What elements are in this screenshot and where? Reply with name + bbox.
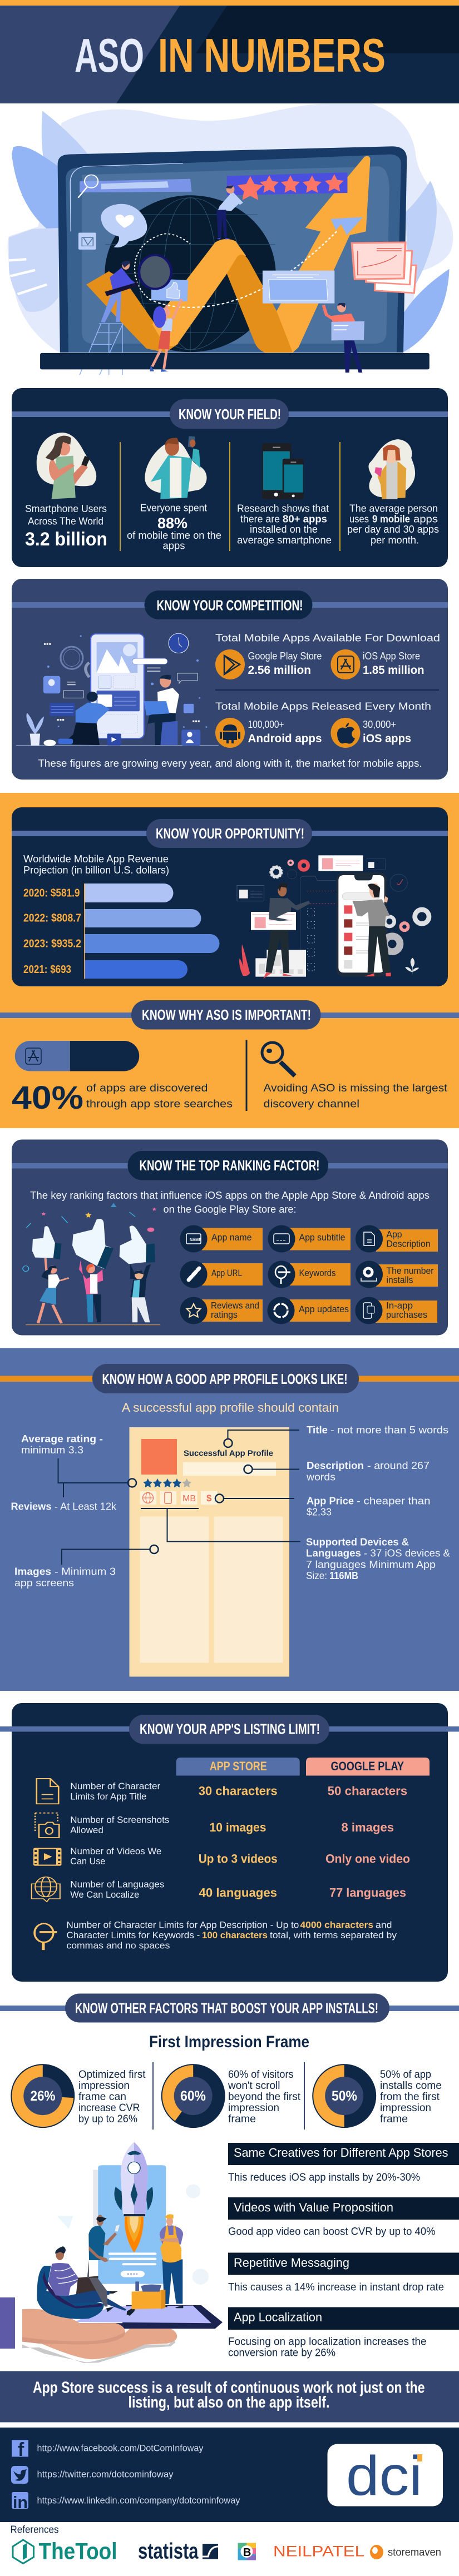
row: videos: Only one video: [325, 1852, 410, 1866]
callout: title: - not more than 5 words: [330, 1425, 448, 1436]
icon: twitter: [11, 2466, 28, 2484]
text: smartphone users: Across The World: [28, 516, 103, 527]
logo: storemaven: storemaven: [388, 2547, 441, 2559]
text: avoiding aso: Avoiding ASO is missing the largest: [264, 1083, 448, 1094]
tile: app name: [180, 1225, 263, 1252]
text: successful app profile subtitle: A successful app profile should contain: [122, 1401, 339, 1414]
row: videos: Can Use: [70, 1857, 105, 1867]
text: smartphone users: [25, 503, 107, 550]
icon: android: [215, 718, 245, 748]
text: description and keyword limits: total, with terms separated by: [270, 1930, 397, 1940]
callout: images: Images: [14, 1566, 51, 1577]
stat: google play store: Google Play Store: [248, 651, 322, 662]
tile: app updates: App updates: [299, 1304, 349, 1314]
logo: storemaven: [370, 2545, 441, 2559]
info icons: $: [206, 1493, 212, 1503]
text: description and keyword limits: 4000 characters: [300, 1920, 373, 1930]
text: 9 mobile apps per day: 9 mobile: [372, 514, 410, 525]
man holding card: [323, 302, 364, 373]
text: visitors won't scroll: beyond the first: [228, 2091, 301, 2103]
bar chart: revenue projection: [23, 884, 219, 979]
tile: app url: App URL: [211, 1268, 242, 1278]
footer panel: [0, 2428, 459, 2522]
tile: keywords: Keywords: [299, 1268, 336, 1278]
rocket and app screen: [57, 2142, 209, 2304]
tile: app description: App: [386, 1229, 402, 1240]
factor: app localization: Focusing on app localization increases the: [228, 2336, 426, 2347]
stat: ios apps: [363, 719, 411, 745]
heading: know your field: KNOW YOUR FIELD!: [179, 406, 281, 423]
row: videos: Number of Videos We: [70, 1847, 161, 1857]
logo: neil patel: NEILPATEL: [273, 2543, 364, 2560]
row: languages: [70, 1879, 406, 1900]
icon: video film: [33, 1848, 61, 1866]
title: [75, 29, 386, 82]
callout connectors: [58, 1430, 300, 1565]
text: 9 mobile apps per day: per day and 30 apps: [347, 524, 439, 535]
callout: supported devices and languages: Supported Devices &: [306, 1537, 409, 1548]
link: facebook: http://www.facebook.com/DotComInfoway: [37, 2443, 204, 2453]
callout: reviews: Reviews: [11, 1501, 51, 1512]
references: [10, 2524, 441, 2564]
factor: repetitive messaging: [228, 2253, 459, 2293]
closing banner: listing, but also on the app itself.: [128, 2394, 329, 2411]
logo: statista: statista: [138, 2539, 199, 2563]
text: 88 percent mobile time: 88%: [157, 515, 187, 532]
row: languages: 40 languages: [199, 1886, 277, 1899]
factor: same creatives: Same Creatives for Different App Stores: [234, 2146, 448, 2160]
search bar: [78, 175, 192, 198]
callout: images: app screens: [14, 1577, 74, 1589]
bar chart: revenue projection: 2021: $693: [23, 964, 71, 976]
text: 88 percent mobile time: [127, 503, 221, 552]
icon: magnifying glass: [262, 1043, 295, 1076]
heading: know your competition: KNOW YOUR COMPETITION!: [157, 597, 303, 614]
thumbs up card: [151, 279, 188, 301]
person holding star: [216, 185, 241, 240]
logo: dci: [327, 2444, 443, 2507]
text: visitors won't scroll: 60% of visitors: [228, 2069, 294, 2081]
bar chart: revenue projection: 2020: $581.9: [23, 887, 80, 900]
closing banner: [0, 2371, 459, 2422]
stat: ios apps: 30,000+: [363, 719, 396, 730]
factor: repetitive messaging: Repetitive Messaging: [234, 2256, 349, 2270]
star rating: [143, 1478, 191, 1487]
icon: document: [37, 1779, 58, 1804]
woman in red skirt: [150, 299, 181, 372]
row: screenshots allowed: 10 images: [209, 1820, 266, 1834]
heading: know your opportunity: KNOW YOUR OPPORTUNITY!: [156, 825, 304, 842]
callout: app price: [307, 1496, 431, 1518]
text: visitors won't scroll: won't scroll: [228, 2080, 280, 2092]
growth arrow ribbon: [86, 156, 371, 353]
stat: google play store: 2.56 million: [248, 664, 311, 677]
ladder: [80, 324, 123, 375]
column header: app store: APP STORE: [210, 1759, 267, 1773]
factor: app localization: conversion rate by 26%: [228, 2347, 335, 2359]
text: figures are growing: These figures are growing every year, and along with it, the market for mobile apps.: [38, 758, 422, 769]
callout: average rating: minimum 3.3: [21, 1445, 83, 1456]
globe: [105, 195, 276, 352]
tile: app updates: [267, 1297, 351, 1324]
tile: keywords: [268, 1261, 351, 1288]
stat: android apps: [248, 719, 322, 745]
heading: know why aso is important: KNOW WHY ASO IS IMPORTANT!: [142, 1006, 311, 1023]
text: apps available heading: Total Mobile Apps Available For Download: [215, 633, 440, 644]
stat: ios app store: iOS App Store: [363, 651, 420, 662]
row: screenshots allowed: 8 images: [342, 1820, 394, 1834]
app users and builders: [37, 2214, 183, 2319]
browser card: [263, 271, 334, 304]
illustration: people lifting thumbs up: [23, 1203, 160, 1325]
illustration: people building an app: [16, 633, 219, 746]
factor: videos with value proposition: Good app video can boost CVR by up to 40%: [228, 2226, 436, 2237]
text: 80+ apps installed: [237, 503, 332, 546]
factor: same creatives: This reduces iOS app installs by 20%-30%: [228, 2172, 420, 2183]
icon: apple: [330, 718, 361, 748]
app profile mockup: [129, 1427, 289, 1677]
text: app installs from first frame: impression: [380, 2102, 431, 2114]
text: description and keyword limits: [66, 1920, 397, 1950]
callout: supported devices and languages: 116MB: [329, 1570, 358, 1581]
panel: know your app's listing limit: [0, 1703, 459, 1982]
panel: know the top ranking factor: [12, 1140, 448, 1336]
callout: average rating: [21, 1433, 103, 1456]
text: revenue chart title: [23, 853, 169, 876]
donut chart: 26 percent: 26%: [30, 2088, 56, 2104]
callout: reviews: [11, 1501, 117, 1512]
tile: the number installs: installs: [386, 1274, 413, 1285]
callout: app price: App Price: [307, 1496, 354, 1507]
paper plane and dashed route: [135, 217, 363, 307]
heading: references: References: [10, 2524, 59, 2535]
text: 80+ apps installed: 80+ apps: [283, 514, 327, 525]
donut chart: 60 percent: [161, 2064, 225, 2128]
stat: ios app store: 1.85 million: [363, 664, 424, 677]
row: videos: [70, 1847, 410, 1867]
text: 80+ apps installed: average smartphone: [237, 535, 332, 546]
factor: repetitive messaging: This causes a 14% increase in instant drop rate: [228, 2282, 444, 2293]
row: app title limit: Limits for App Title: [70, 1791, 146, 1801]
icon: facebook: f: [18, 2439, 24, 2460]
tile: app name: NAME: [190, 1238, 201, 1242]
text: optimized first impression: increase CVR: [78, 2102, 140, 2114]
text: 80+ apps installed: Research shows that: [237, 503, 329, 514]
tile: app description: Description: [386, 1239, 431, 1249]
panel: know your opportunity: [12, 807, 448, 986]
icon: man taking selfie: [145, 436, 207, 499]
text: 88 percent mobile time: of mobile time on the: [127, 530, 221, 541]
magnifier person: [101, 255, 171, 322]
heading: know your app's listing limit: KNOW YOUR APP'S LISTING LIMIT!: [140, 1720, 320, 1737]
callout: description: [306, 1460, 430, 1482]
row: screenshots allowed: Allowed: [70, 1825, 103, 1835]
icon: facebook: [12, 2439, 28, 2460]
heading: know the top ranking factor: KNOW THE TOP RANKING FACTOR!: [139, 1157, 319, 1174]
row: languages: We Can Localize: [70, 1890, 139, 1900]
bar chart: revenue projection: 2022: $808.7: [23, 912, 81, 924]
stat: 40 percent discovered: 40%: [12, 1080, 83, 1116]
text: optimized first impression: Optimized first: [78, 2069, 146, 2081]
factor: app localization: App Localization: [234, 2310, 322, 2324]
text: optimized first impression: impression: [78, 2080, 130, 2092]
stat: ios app store: [363, 651, 424, 677]
callout: supported devices and languages: Languages: [306, 1548, 361, 1559]
text: revenue chart title: Projection (in billion U.S. dollars): [23, 865, 169, 876]
text: revenue chart title: Worldwide Mobile App Revenue: [23, 853, 169, 865]
text: smartphone users: 3.2 billion: [25, 529, 107, 550]
illustration: people designing an app: [237, 855, 429, 979]
heading: know how a good app profile looks like: KNOW HOW A GOOD APP PROFILE LOOKS LIKE!: [102, 1371, 347, 1387]
column header: google play: [306, 1758, 430, 1776]
text: description and keyword limits: and: [376, 1920, 392, 1930]
icon: woman with smartphone: [37, 433, 96, 499]
text: optimized first impression: [78, 2069, 146, 2125]
tile: app description: [356, 1225, 438, 1252]
section: know why aso is important: [0, 1000, 459, 1116]
text: 80+ apps installed: there are: [240, 514, 280, 525]
tile: the number installs: The number: [386, 1265, 434, 1276]
callout: supported devices and languages: 7 languages Minimum App: [306, 1559, 436, 1570]
text: visitors won't scroll: [228, 2069, 301, 2125]
hand holding phone: [22, 2305, 223, 2363]
text: ranking factors intro: The key ranking factors that influence iOS apps on the Apple App Store & Android apps: [30, 1190, 430, 1201]
text: app installs from first frame: 50% of app: [380, 2069, 431, 2081]
text: description and keyword limits: 100 characters: [202, 1930, 268, 1940]
column header: app store: [176, 1758, 300, 1776]
tile: reviews and ratings: [180, 1297, 263, 1324]
icon: two smartphones: [262, 443, 304, 499]
panel: know your field: [12, 388, 448, 567]
callout: supported devices and languages: - 37 iOS devices &: [364, 1548, 450, 1559]
row: app title limit: [70, 1781, 407, 1801]
tile: app subtitle: App subtitle: [299, 1232, 345, 1243]
text: app installs from first frame: [380, 2069, 442, 2125]
donut chart: 50 percent: 50%: [332, 2088, 357, 2104]
text: visitors won't scroll: impression: [228, 2102, 279, 2114]
stat: google play store: [248, 651, 322, 677]
callout: description: words: [306, 1471, 335, 1482]
stat: 40 percent discovered: [12, 1080, 233, 1116]
text: 9 mobile apps per day: [347, 503, 439, 546]
text: ranking factors intro: on the Google Play Store are:: [164, 1204, 296, 1215]
tile: in-app purchases: [355, 1297, 437, 1324]
donut chart: 60 percent: 60%: [180, 2088, 206, 2104]
panel: know your competition: [12, 579, 448, 780]
row: app title limit: 50 characters: [328, 1784, 407, 1798]
icon: app store: [330, 649, 361, 679]
row: screenshots allowed: [70, 1815, 394, 1835]
subheading: first impression frame: First Impression Frame: [149, 2033, 309, 2051]
star rating: [227, 172, 347, 200]
text: optimized first impression: frame can: [78, 2091, 126, 2103]
column header: google play: GOOGLE PLAY: [330, 1759, 404, 1773]
logo: dci: dci: [346, 2445, 422, 2507]
factor: videos with value proposition: Videos with Value Proposition: [234, 2201, 393, 2214]
link: twitter: https://twitter.com/dotcominfoway: [37, 2469, 174, 2480]
logo: thetool: [13, 2538, 117, 2564]
text: optimized first impression: by up to 26%: [78, 2113, 137, 2125]
tile: app name: App name: [211, 1232, 251, 1243]
callout: description: - around 267: [367, 1460, 430, 1471]
row: screenshots allowed: Number of Screenshots: [70, 1815, 169, 1825]
text: visitors won't scroll: frame: [228, 2113, 256, 2125]
callout: reviews: - At Least 12k: [55, 1501, 117, 1512]
row: videos: Up to 3 videos: [199, 1852, 278, 1866]
text: 9 mobile apps per day: uses: [349, 514, 369, 525]
stat: 40 percent discovered: of apps are discovered: [86, 1083, 208, 1094]
text: app installs from first frame: installs come: [380, 2080, 442, 2092]
icon: screenshot camera: [35, 1813, 59, 1838]
text: 88 percent mobile time: Everyone spent: [140, 503, 207, 514]
text: description and keyword limits: commas and no spaces: [66, 1940, 170, 1950]
text: avoiding aso: discovery channel: [264, 1099, 359, 1110]
factor: same creatives: [228, 2143, 459, 2183]
app profile mockup: Successful App Profile: [184, 1449, 273, 1458]
text: app installs from first frame: frame: [380, 2113, 408, 2125]
logo: b: B: [243, 2547, 251, 2559]
icon: linkedin: in: [13, 2493, 28, 2512]
section: know other factors that boost your app installs: [0, 1994, 459, 2363]
text: smartphone users: Smartphone Users: [25, 503, 107, 514]
title: IN NUMBERS: [158, 29, 386, 82]
tile: app subtitle: [268, 1225, 351, 1252]
text: 88 percent mobile time: apps: [162, 540, 185, 552]
text: 9 mobile apps per day: apps: [413, 514, 438, 525]
link: linkedin: https://www.linkedin.com/company/dotcominfoway: [37, 2495, 240, 2505]
row: languages: 77 languages: [329, 1886, 406, 1899]
tile: reviews and ratings: ratings: [211, 1309, 238, 1320]
header banner: [0, 0, 459, 103]
text: 80+ apps installed: installed on the: [250, 524, 318, 535]
icon: woman in cardigan: [368, 439, 415, 499]
callout: app price: - cheaper than: [357, 1496, 431, 1507]
text: 9 mobile apps per day: per month.: [371, 535, 419, 546]
text: app installs from first frame: from the first: [380, 2091, 440, 2103]
callout: supported devices and languages: Size:: [306, 1570, 327, 1581]
row: languages: Number of Languages: [70, 1879, 164, 1889]
bar chart: revenue projection: 2023: $935.2: [23, 937, 81, 950]
title: ASO: [75, 29, 144, 82]
callout: description: Description: [307, 1460, 364, 1471]
callout: title: Title: [307, 1425, 328, 1436]
tile: app url: [180, 1261, 263, 1288]
stat: android apps: 100,000+: [248, 719, 284, 730]
icon: google play: [215, 649, 245, 679]
text: description and keyword limits: Number of Character Limits for App Description - Up to: [66, 1920, 299, 1930]
text: ranking factors intro: [30, 1190, 430, 1215]
orange section background: [0, 793, 459, 1128]
stat: ios apps: iOS apps: [363, 732, 411, 745]
text: apps released heading: Total Mobile Apps Released Every Month: [215, 701, 431, 712]
callout: average rating: Average rating -: [21, 1433, 103, 1445]
illustration: rocket launch from phone: [0, 2142, 223, 2363]
callout: images: [14, 1566, 116, 1589]
callout: images: - Minimum 3: [55, 1566, 116, 1577]
info icons: MB: [182, 1494, 196, 1503]
row: app title limit: Number of Character: [70, 1781, 161, 1791]
info icons: [140, 1491, 217, 1505]
panel: know how a good app profile looks like: [0, 1348, 459, 1691]
logo: b: [238, 2543, 256, 2560]
stat: android apps: Android apps: [248, 732, 322, 745]
stat: 40 percent discovered: through app store searches: [86, 1099, 233, 1110]
progress bar: 40 percent: [15, 1041, 139, 1071]
factor: app localization: [228, 2307, 459, 2359]
donut chart: 50 percent: [312, 2064, 376, 2128]
row: app title limit: 30 characters: [199, 1784, 278, 1798]
text: avoiding aso: [264, 1083, 448, 1110]
callout: supported devices and languages: [306, 1537, 450, 1581]
tile: the number installs: [356, 1261, 438, 1288]
donut chart: 26 percent: [11, 2064, 75, 2128]
tile: in-app purchases: In-app: [386, 1300, 413, 1311]
chart cards: [352, 242, 416, 293]
callout: app price: $2.33: [307, 1507, 332, 1518]
tile: in-app purchases: purchases: [386, 1309, 427, 1320]
text: 9 mobile apps per day: The average person: [349, 503, 438, 514]
factor: videos with value proposition: [228, 2197, 459, 2237]
logo: thetool: TheTool: [39, 2538, 117, 2564]
text: description and keyword limits: Character Limits for Keywords -: [66, 1930, 200, 1940]
tile: reviews and ratings: Reviews and: [211, 1300, 259, 1311]
icon: globe languages: [32, 1877, 60, 1902]
base of laptop: [40, 353, 430, 369]
speech bubble heart: [101, 204, 147, 247]
hero illustration: laptop with growth arrow: [8, 103, 453, 375]
icon: keyword magnifier: [34, 1924, 57, 1950]
